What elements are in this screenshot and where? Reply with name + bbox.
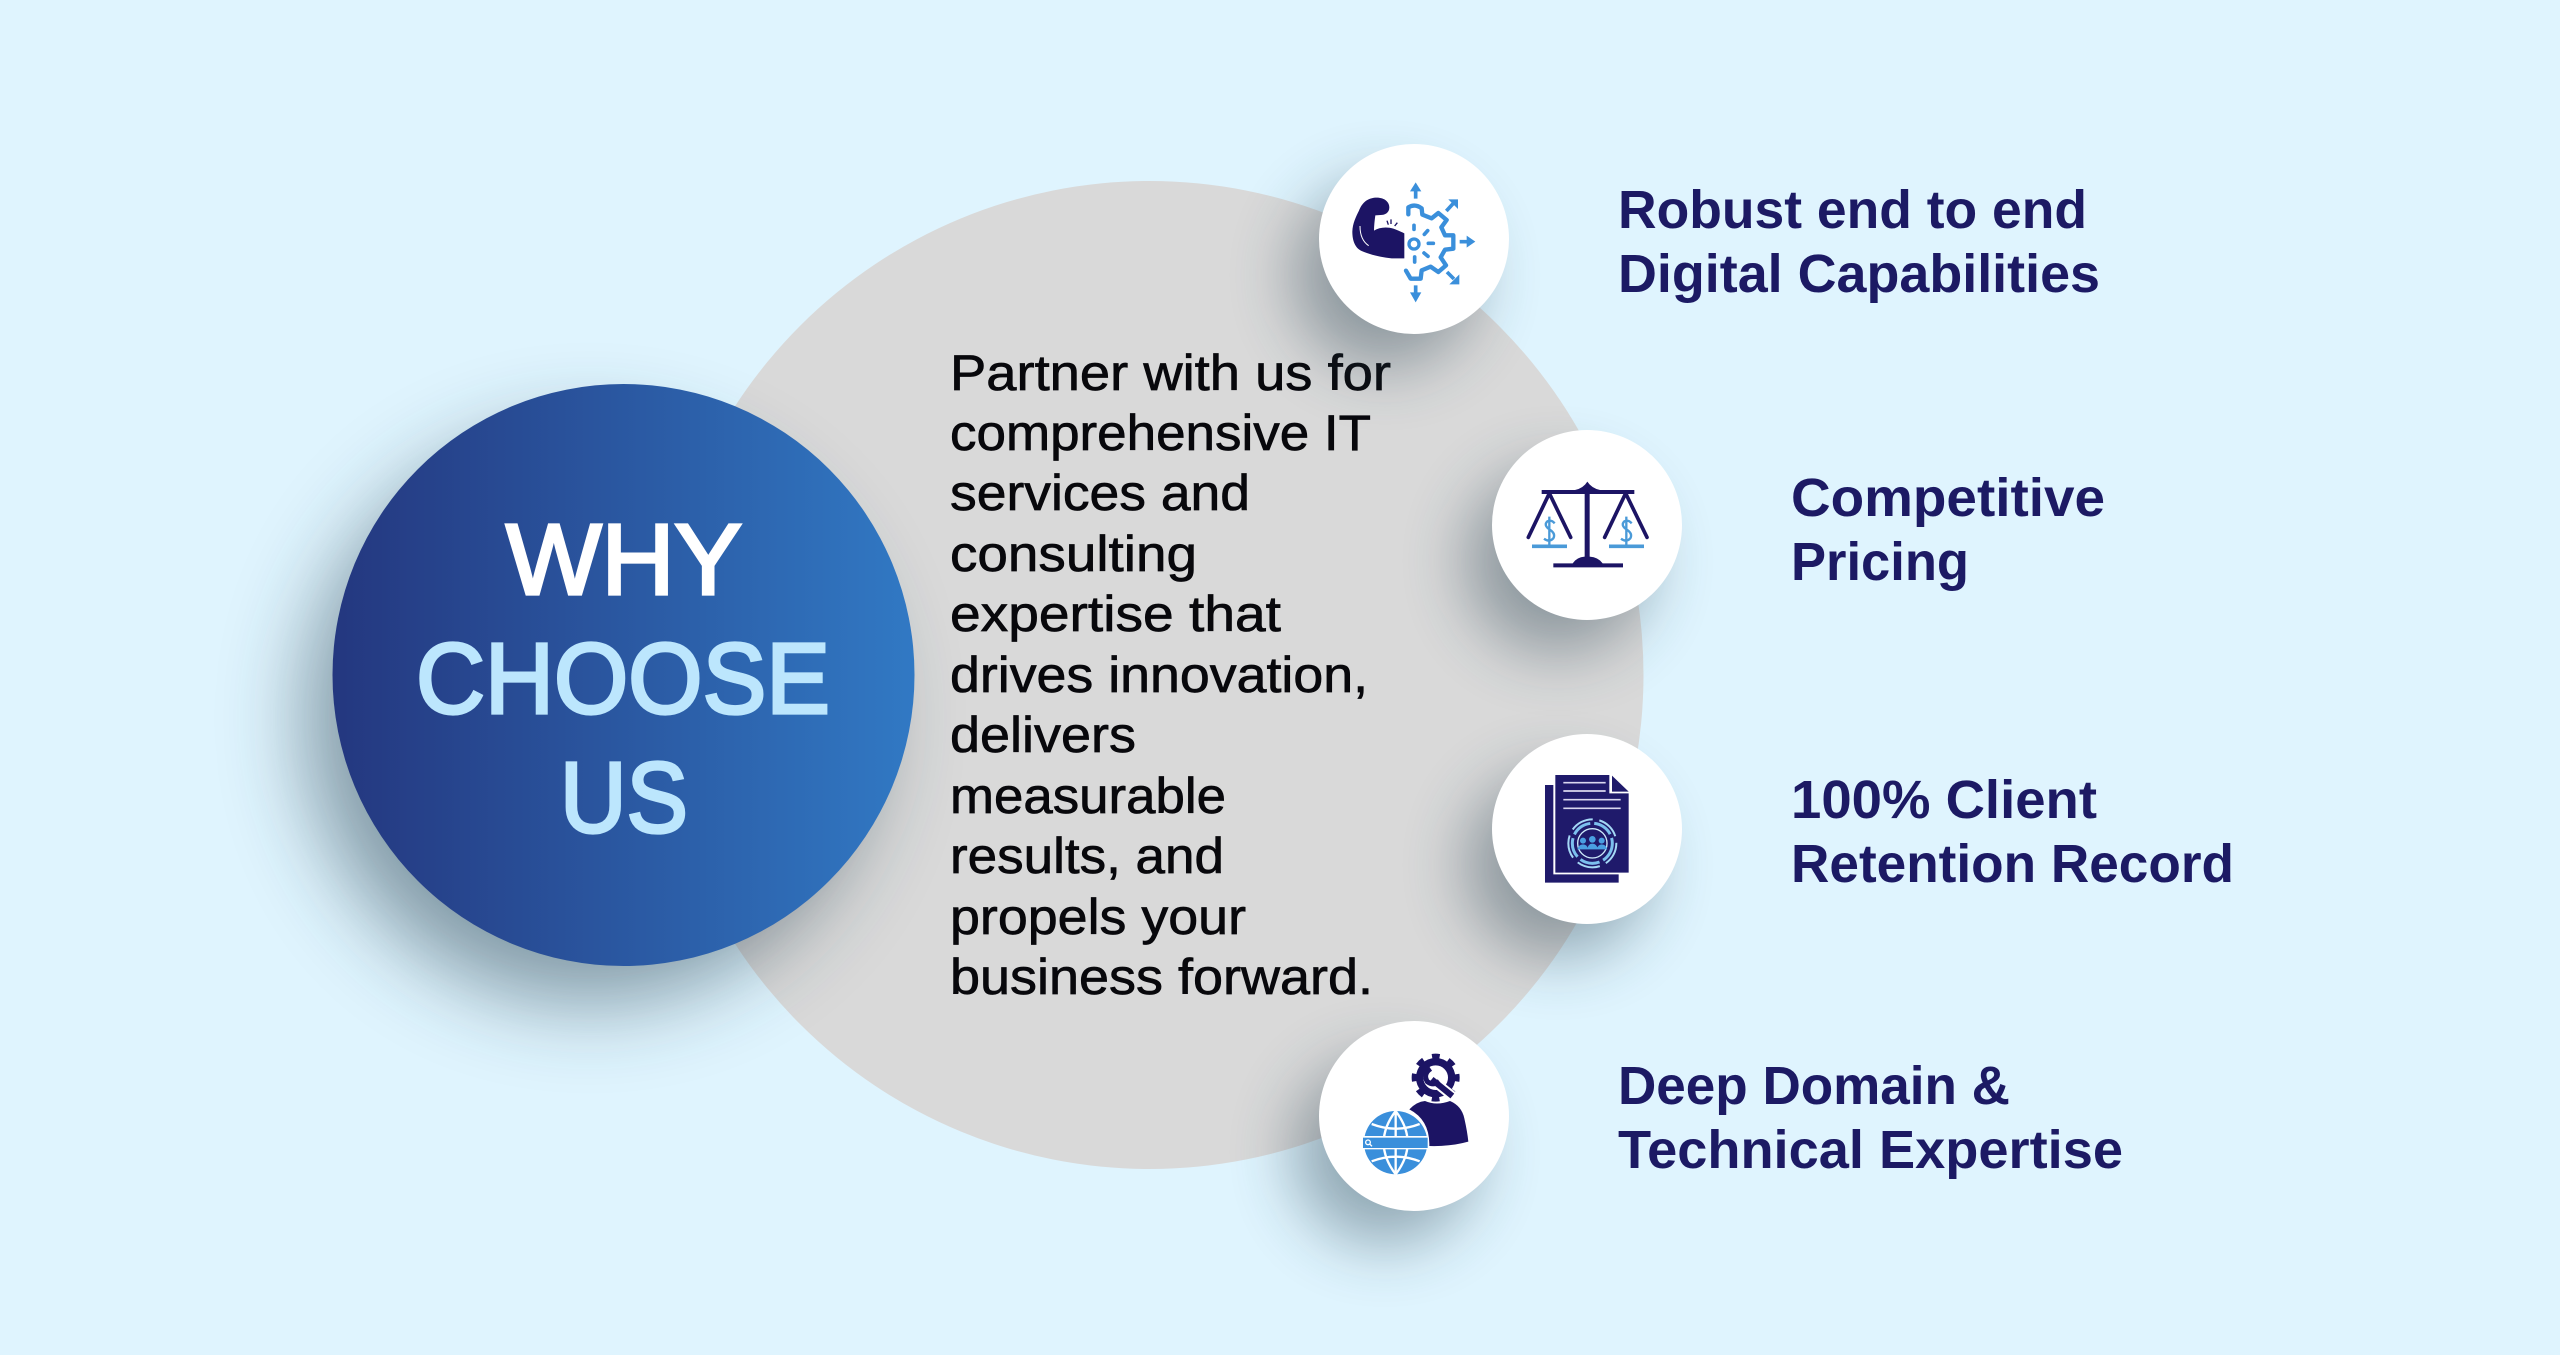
panel: why choose us badge (305, 384, 914, 1003)
title: WHY (506, 504, 742, 616)
text block: partner description: comprehensive IT (950, 405, 1371, 461)
heading: capabilities (1618, 180, 2100, 304)
text block: partner description: services and (950, 465, 1250, 521)
title (416, 504, 830, 854)
text block: partner description: results, and (950, 828, 1224, 884)
icon: balance scale (1528, 482, 1647, 567)
icon: expert with gear and globe (1362, 1057, 1468, 1176)
heading: retention: 100% Client (1791, 770, 2097, 830)
icon: document with client cycle (1545, 775, 1629, 883)
item 2: competitive pricing (1466, 430, 2105, 653)
heading: pricing: Pricing (1791, 532, 1969, 592)
heading: retention (1791, 770, 2234, 894)
heading: expertise: Technical Expertise (1618, 1120, 2123, 1180)
heading: capabilities: Robust end to end (1618, 180, 2087, 240)
text block: partner description: Partner with us for (950, 345, 1391, 401)
item 1: digital capabilities (1293, 144, 2100, 367)
text block: partner description: expertise that (950, 586, 1281, 642)
title: US (560, 742, 688, 854)
text block: partner description: drives innovation, (950, 647, 1368, 703)
item 3: client retention (1466, 734, 2234, 957)
heading: expertise (1618, 1056, 2123, 1180)
heading: capabilities: Digital Capabilities (1618, 244, 2100, 304)
grey central circle (656, 181, 1644, 1169)
heading: pricing: Competitive (1791, 468, 2105, 528)
text block: partner description: propels your (950, 889, 1246, 945)
item 4: domain expertise (1293, 1021, 2123, 1244)
text block: partner description: delivers (950, 707, 1136, 763)
title: CHOOSE (416, 623, 830, 735)
heading: pricing (1791, 468, 2105, 592)
text block: partner description: consulting (950, 526, 1197, 582)
text block: partner description: measurable (950, 768, 1226, 824)
text block: partner description (950, 345, 1391, 1005)
text block: partner description: business forward. (950, 949, 1373, 1005)
heading: retention: Retention Record (1791, 834, 2234, 894)
heading: expertise: Deep Domain & (1618, 1056, 2010, 1116)
icon: flexed arm and gear (1352, 182, 1475, 302)
